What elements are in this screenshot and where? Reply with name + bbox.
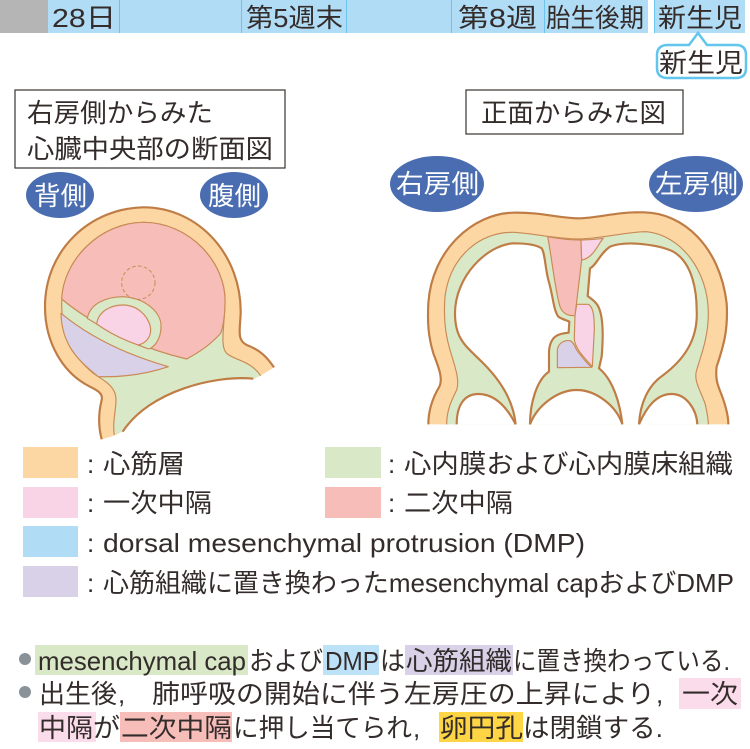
legend: septum secundum xyxy=(325,487,513,518)
upper septum primum xyxy=(581,238,603,260)
note: second bullet xyxy=(19,678,741,743)
diagram: right-side section of heart xyxy=(45,207,274,439)
legend: DMP: dorsal mesenchymal protrusion (DMP) xyxy=(103,528,585,558)
legend: myocardium: 心筋層 xyxy=(103,449,185,479)
heading: section view xyxy=(15,90,285,168)
myocardium outer wall xyxy=(428,212,728,424)
legend: septum secundum: 二次中隔 xyxy=(404,488,513,518)
heading: front view: 正面からみた図 xyxy=(481,98,666,128)
timeline bar: 第5週末 xyxy=(246,3,343,33)
note: second bullet: に押し当てられ xyxy=(233,713,412,743)
legend: endocardium: 心内膜および心内膜床組織 xyxy=(404,449,733,479)
note: first bullet: は xyxy=(380,646,405,676)
legend: replaced tissue: : xyxy=(87,568,94,598)
legend: septum primum: 一次中隔 xyxy=(103,488,212,518)
note: second bullet: は閉鎖する. xyxy=(523,713,663,743)
note: second bullet: 出生後 xyxy=(39,679,117,709)
legend: myocardium xyxy=(23,447,185,479)
note: second bullet: 一次 xyxy=(682,679,738,709)
legend: DMP: : xyxy=(87,528,94,558)
timeline bar: 新生児 xyxy=(658,3,742,33)
callout: newborn xyxy=(657,33,746,78)
foramen ovale dashed outline xyxy=(122,266,155,299)
timeline bar: 28日 xyxy=(52,3,116,33)
lower septum primum xyxy=(574,304,594,367)
label: ventral side xyxy=(200,172,268,218)
inner wall line xyxy=(62,222,261,435)
timeline bar: 第8週 xyxy=(458,3,537,33)
note: second bullet: , xyxy=(413,713,420,743)
left chamber xyxy=(455,243,569,424)
legend: septum secundum: : xyxy=(388,488,395,518)
legend: septum primum: : xyxy=(87,488,94,518)
label: right atrium side: 右房側 xyxy=(396,169,479,199)
legend xyxy=(23,447,734,598)
label: right atrium side xyxy=(390,156,484,212)
septum secundum area xyxy=(62,222,225,359)
heading: section view: 心臓中央部の断面図 xyxy=(27,134,273,164)
note: first bullet xyxy=(19,645,730,676)
legend: myocardium: : xyxy=(87,449,94,479)
septum primum xyxy=(97,305,151,345)
timeline bar: 胎生後期 xyxy=(546,3,644,33)
outer wall line xyxy=(45,207,274,439)
label: dorsal side: 背側 xyxy=(34,181,87,211)
heading: front view xyxy=(466,90,683,134)
myocardium fill xyxy=(45,207,274,439)
note: second bullet: 中隔が xyxy=(39,713,120,743)
septum secundum xyxy=(548,237,582,316)
note: first bullet: 心筋組織 xyxy=(406,646,512,676)
legend: replaced tissue: 心筋組織に置き換わったmesenchymal capおよびDMP xyxy=(103,568,734,598)
timeline bar xyxy=(0,0,745,33)
replaced tissue xyxy=(557,341,592,368)
label: dorsal side xyxy=(26,172,94,218)
legend: endocardium: : xyxy=(388,449,395,479)
diagram: front view of heart xyxy=(428,212,728,424)
replaced myocardial tissue xyxy=(61,313,168,377)
note: second bullet: 肺呼吸の開始に伴う左房圧の上昇により xyxy=(152,679,655,709)
note: first bullet: DMP xyxy=(325,646,379,676)
note: second bullet: , xyxy=(118,679,125,709)
heading: section view: 右房側からみた xyxy=(27,98,213,128)
right arch xyxy=(639,394,697,424)
note: first bullet: および xyxy=(249,646,323,676)
middle arch xyxy=(530,390,622,424)
label: ventral side: 腹側 xyxy=(208,181,261,211)
legend: septum primum xyxy=(23,487,212,518)
right chamber xyxy=(588,244,697,424)
ring around septum primum xyxy=(87,297,161,349)
callout: newborn: 新生児 xyxy=(659,48,743,78)
endocardial tissue fill xyxy=(62,222,261,435)
endocardial tissue xyxy=(444,232,708,424)
lower outer line xyxy=(123,378,253,432)
note: second bullet: 二次中隔 xyxy=(121,713,232,743)
label: left atrium side xyxy=(649,156,743,212)
label: left atrium side: 左房側 xyxy=(655,169,738,199)
note: first bullet: mesenchymal cap xyxy=(38,646,246,676)
note: second bullet: 卵円孔 xyxy=(440,713,523,743)
note: second bullet: , xyxy=(656,679,663,709)
left arch xyxy=(457,394,516,424)
note: first bullet: に置き換わっている. xyxy=(513,646,730,676)
